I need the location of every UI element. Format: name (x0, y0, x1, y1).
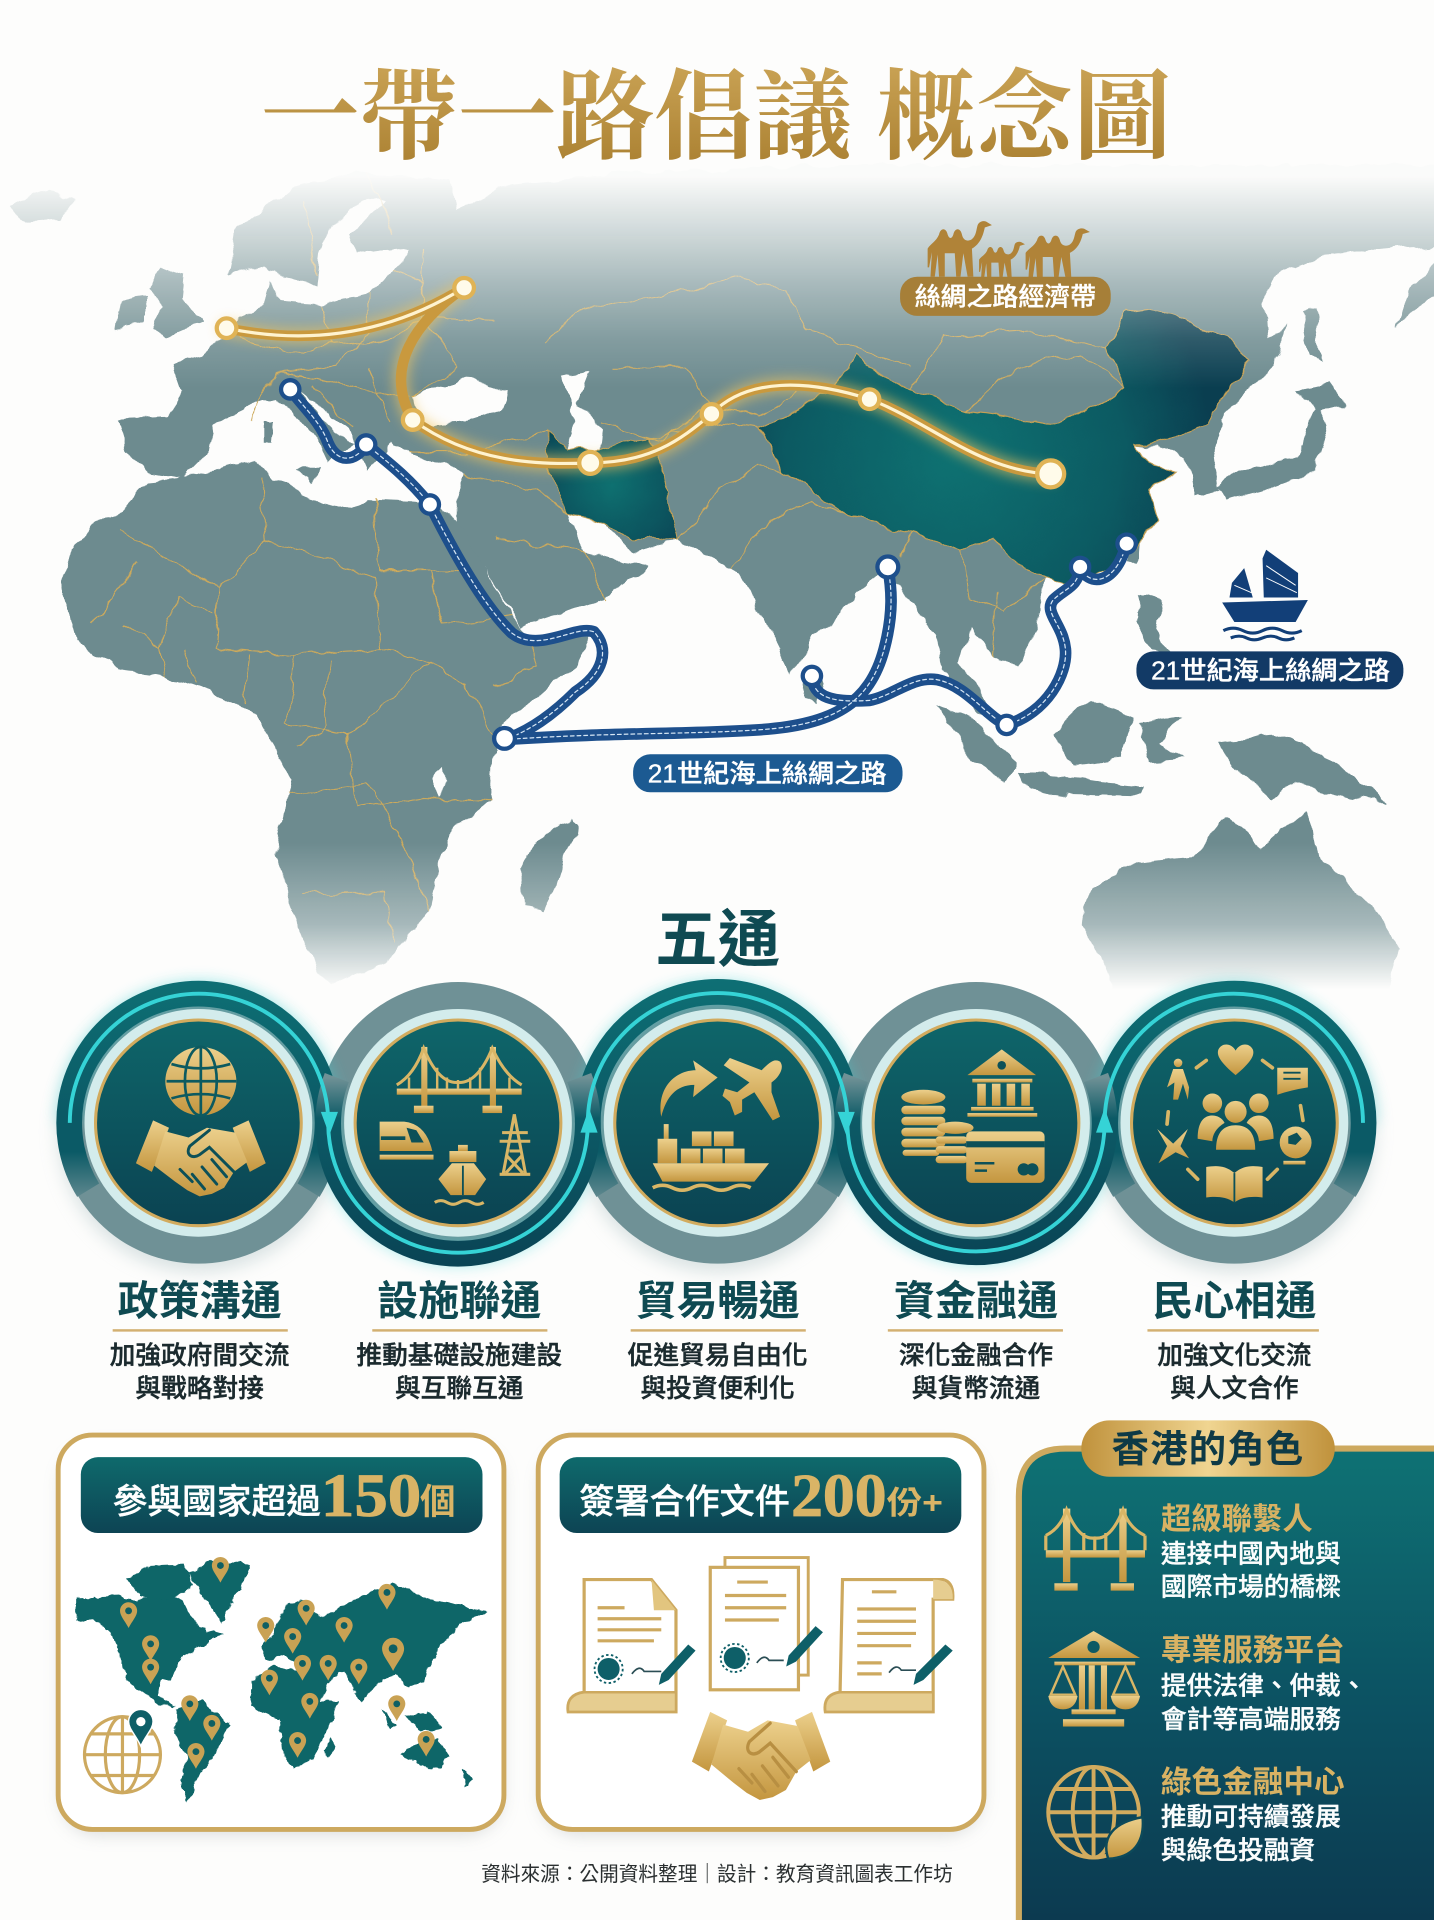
icon: people culture (1157, 1044, 1312, 1202)
role: green finance: 與綠色投融資 (1161, 1836, 1315, 1865)
maritime nodes (281, 380, 1136, 749)
heading: five connectivities: 五通 (655, 905, 780, 975)
inland seas (411, 372, 603, 796)
silk road nodes (217, 278, 1064, 487)
role: professional services: 提供法律、仲裁、 (1161, 1672, 1367, 1701)
panel: role of Hong Kong (1019, 1420, 1434, 1920)
label: maritime silk road east: 21世紀海上絲綢之路 (1151, 657, 1390, 686)
icon: junk ship (1222, 550, 1308, 640)
header pill: 參與國家超過 (113, 1482, 321, 1521)
item: unimpeded trade: 與投資便利化 (640, 1374, 795, 1403)
item: policy coordination (110, 1278, 290, 1403)
item: unimpeded trade: 貿易暢通 (636, 1278, 800, 1324)
land and borders (10, 165, 1434, 1004)
item: people to people: 加強文化交流 (1157, 1341, 1312, 1370)
silk road economic belt route (217, 278, 1064, 487)
panel: cooperation documents (538, 1435, 984, 1834)
role: super connector: 超級聯繫人 (1161, 1502, 1313, 1536)
label: maritime silk road east (1136, 651, 1403, 689)
role: super connector: 連接中國內地與 (1161, 1539, 1341, 1568)
icon: globe and handshake (136, 1047, 266, 1196)
outer ring shadows (58, 991, 1375, 1272)
item: financial integration: 與貨幣流通 (912, 1374, 1041, 1403)
land masses (10, 165, 1434, 1004)
item: financial integration: 深化金融合作 (899, 1341, 1053, 1370)
item: unimpeded trade: 促進貿易自由化 (628, 1341, 808, 1370)
item: financial integration (888, 1278, 1063, 1403)
header pill (560, 1457, 961, 1533)
title: 一帶一路倡議 概念圖 (261, 65, 1172, 173)
heading pill (1081, 1420, 1335, 1477)
header pill: 200 (791, 1462, 887, 1530)
header pill: 份+ (887, 1484, 943, 1520)
icon: camels (928, 221, 1090, 278)
heading pill: 香港的角色 (1112, 1428, 1304, 1470)
role: professional services (1048, 1631, 1367, 1734)
item: people to people (1147, 1278, 1319, 1403)
label: silk road economic belt (900, 277, 1111, 316)
country borders (92, 171, 1127, 943)
role: green finance: 綠色金融中心 (1161, 1766, 1345, 1800)
item: facilities connectivity: 設施聯通 (377, 1278, 541, 1324)
iran (547, 429, 677, 540)
item: policy coordination: 加強政府間交流 (110, 1341, 290, 1370)
item: facilities connectivity (356, 1278, 562, 1403)
glowing dark arcs (69, 992, 1364, 1254)
item: people to people: 民心相通 (1152, 1278, 1316, 1324)
maritime silk road route (281, 380, 1136, 749)
icon: document middle (710, 1558, 823, 1690)
icon: document left (568, 1580, 696, 1712)
item: facilities connectivity: 推動基礎設施建設 (356, 1341, 562, 1370)
world map with pins (77, 1557, 487, 1802)
cyan flow line (70, 993, 1363, 1253)
item: people to people: 與人文合作 (1170, 1374, 1299, 1403)
label: maritime silk road west: 21世紀海上絲綢之路 (648, 759, 887, 788)
map: Eurasia Africa Oceania (10, 165, 1434, 1004)
inner discs (84, 1009, 1348, 1237)
item: unimpeded trade (628, 1278, 808, 1403)
label: maritime silk road west (633, 754, 903, 792)
icon: handshake (692, 1712, 830, 1800)
role: green finance (1048, 1766, 1345, 1865)
footer source: 資料來源：公開資料整理｜設計：教育資訊圖表工作坊 (481, 1862, 953, 1886)
item: facilities connectivity: 與互聯互通 (395, 1374, 524, 1403)
header pill: 個 (420, 1481, 456, 1521)
icon: bank coins card (901, 1049, 1045, 1183)
five connectivity rings (58, 982, 1375, 1272)
icon: bridge train ship pylon (380, 1047, 530, 1204)
header pill (81, 1457, 482, 1533)
header pill: 150 (321, 1462, 421, 1530)
item: policy coordination: 與戰略對接 (135, 1374, 264, 1403)
role: green finance: 推動可持續發展 (1161, 1803, 1341, 1832)
item: financial integration: 資金融通 (894, 1278, 1058, 1324)
role: super connector (1046, 1502, 1341, 1602)
item: policy coordination: 政策溝通 (118, 1278, 282, 1324)
china (759, 309, 1249, 582)
label: silk road economic belt: 絲綢之路經濟帶 (915, 283, 1096, 312)
panel: participating countries (58, 1435, 504, 1834)
flow arrowheads (321, 1108, 1113, 1135)
slate rings (58, 982, 1375, 1264)
role: professional services: 會計等高端服務 (1161, 1705, 1341, 1734)
role: professional services: 專業服務平台 (1161, 1632, 1345, 1667)
icon: document right (825, 1580, 953, 1712)
icon: globe with pin (84, 1709, 160, 1793)
location pins (120, 1557, 435, 1769)
header pill: 簽署合作文件 (579, 1482, 790, 1521)
role: super connector: 國際市場的橋樑 (1161, 1573, 1341, 1602)
icon: ship arrow plane (653, 1058, 782, 1190)
